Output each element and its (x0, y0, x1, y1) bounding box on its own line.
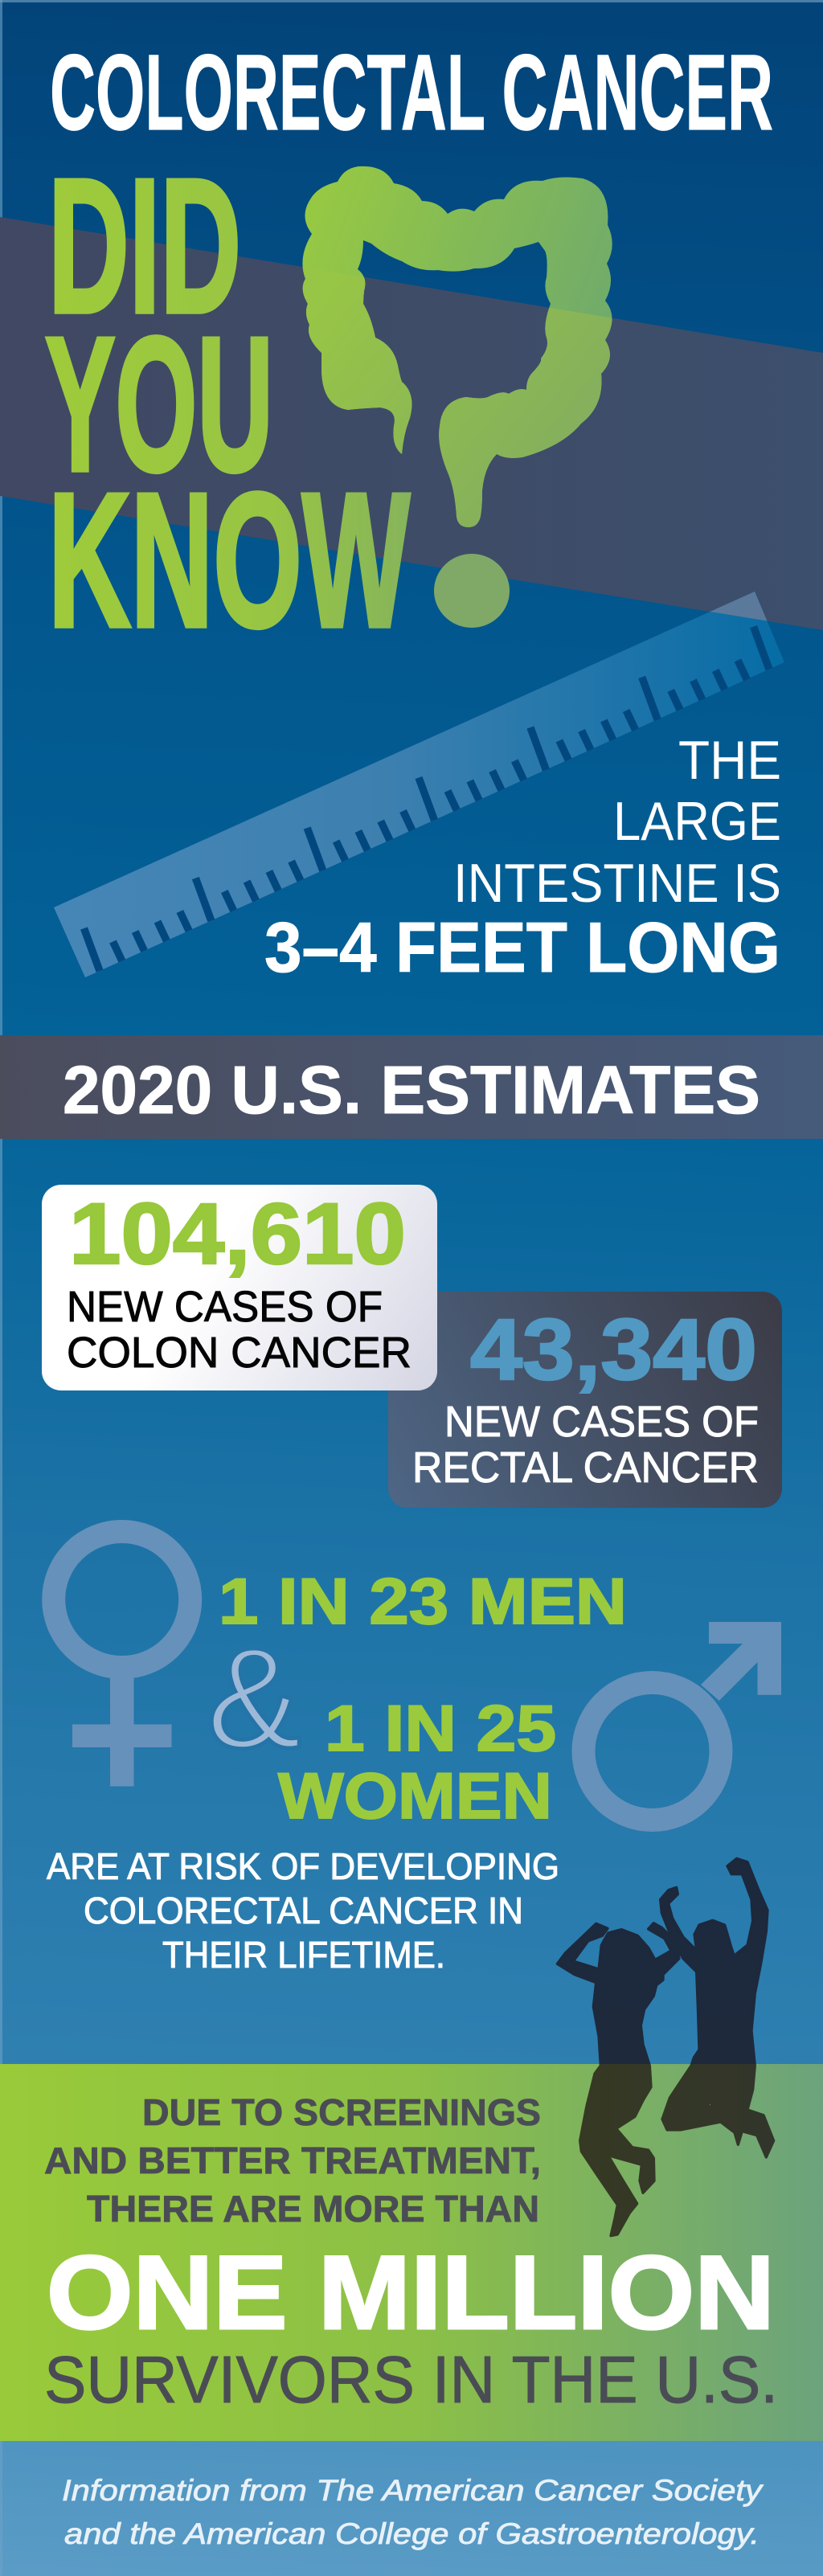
icon: jumping people silhouette (557, 1858, 774, 2236)
icon: ruler (54, 592, 784, 977)
text: survivors message: SURVIVORS IN THE U.S. (44, 2342, 778, 2417)
text: risk statistics (207, 1566, 627, 1833)
text: survivors message: ONE MILLION (47, 2234, 775, 2351)
footer source note: and the American College of Gastroenterology. (64, 2517, 760, 2550)
panel: survivors green band (0, 2064, 823, 2441)
icon: male symbol (583, 1622, 781, 1820)
panel: colon cancer card: COLON CANCER (67, 1329, 412, 1377)
text: large intestine length (264, 730, 781, 987)
diagonal grey band (0, 217, 823, 630)
heading: did you know: YOU (45, 298, 273, 511)
panel: rectal cancer card (388, 1292, 782, 1508)
text: lifetime risk note: ARE AT RISK OF DEVELOPING (47, 1845, 559, 1887)
banner: 2020 U.S. estimates (0, 1035, 823, 1139)
text: risk statistics: 1 IN 25 (325, 1693, 556, 1765)
heading: did you know: DID (48, 140, 241, 353)
panel: colon cancer card (42, 1185, 437, 1390)
footer source note: Information from The American Cancer Society (62, 2474, 764, 2507)
text: large intestine length: 3–4 FEET LONG (264, 907, 780, 987)
icon: colon shaped question mark (302, 166, 612, 628)
text: risk statistics: WOMEN (278, 1760, 552, 1833)
text: lifetime risk note (47, 1845, 559, 1976)
text: risk statistics: 1 IN 23 MEN (219, 1566, 627, 1638)
text: survivors message: THERE ARE MORE THAN (87, 2188, 539, 2230)
panel: colon cancer card: 104,610 (69, 1185, 406, 1282)
footer source note (62, 2474, 764, 2550)
icon: female symbol (54, 1532, 190, 1786)
text: survivors message: AND BETTER TREATMENT, (44, 2140, 541, 2181)
panel: rectal cancer card: RECTAL CANCER (412, 1444, 759, 1492)
heading: did you know: KNOW (48, 454, 410, 667)
panel: rectal cancer card: NEW CASES OF (444, 1398, 759, 1446)
panel: colon cancer card: NEW CASES OF (67, 1283, 383, 1331)
banner: 2020 U.S. estimates: 2020 U.S. ESTIMATES (63, 1052, 760, 1128)
text: survivors message (44, 2091, 778, 2417)
text: large intestine length: INTESTINE IS (453, 853, 781, 914)
text: large intestine length: THE (678, 730, 781, 791)
text: risk statistics: & (207, 1618, 301, 1778)
text: large intestine length: LARGE (613, 791, 781, 852)
heading: did you know (45, 140, 410, 667)
panel: rectal cancer card: 43,340 (470, 1300, 757, 1398)
text: survivors message: DUE TO SCREENINGS (142, 2091, 541, 2133)
text: lifetime risk note: COLORECTAL CANCER IN (84, 1890, 523, 1931)
text: lifetime risk note: THEIR LIFETIME. (162, 1934, 445, 1976)
